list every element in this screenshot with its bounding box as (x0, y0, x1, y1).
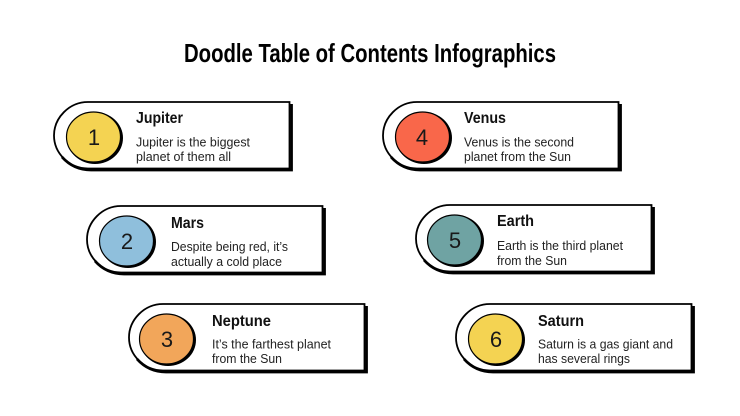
text: Neptune (212, 313, 332, 366)
panel: Mars (87, 206, 324, 274)
icon: number 5 circle (428, 215, 484, 267)
text: Jupiter (136, 110, 251, 164)
text: Venus: Venus (464, 110, 506, 127)
icon: number 2 circle (100, 216, 156, 268)
text: Earth: from the Sun (497, 254, 567, 268)
text: Venus: Venus is the second (464, 136, 574, 150)
icon: number 4 circle (396, 112, 452, 164)
text: Mars (171, 215, 288, 269)
text: Venus: planet from the Sun (464, 150, 571, 164)
panel: Earth (416, 205, 654, 273)
text: Jupiter: Jupiter (136, 110, 183, 127)
icon: number 4 circle: 4 (416, 125, 428, 150)
panel: Jupiter (54, 102, 292, 170)
icon: number 1 circle: 1 (88, 125, 100, 150)
icon: number 1 circle (66, 112, 123, 164)
text: Earth (497, 213, 624, 268)
icon: number 5 circle: 5 (449, 228, 461, 253)
text: Mars: Despite being red, it’s (171, 240, 288, 254)
icon: number 6 circle: 6 (490, 327, 502, 352)
panel: Neptune (129, 304, 366, 372)
title: Doodle Table of Contents Infographics (184, 38, 556, 68)
panel: Venus (383, 102, 620, 170)
panel: Saturn (456, 304, 694, 372)
icon: number 3 circle (140, 314, 196, 366)
text: Saturn: has several rings (538, 352, 630, 366)
text: Earth: Earth is the third planet (497, 239, 624, 253)
icon: number 2 circle: 2 (121, 229, 133, 254)
text: Mars: Mars (171, 215, 204, 232)
text: Neptune: It’s the farthest planet (212, 338, 332, 352)
text: Neptune: from the Sun (212, 352, 282, 366)
text: Saturn: Saturn is a gas giant and (538, 338, 673, 352)
text: Venus (464, 110, 574, 164)
text: Mars: actually a cold place (171, 255, 282, 269)
text: Saturn: Saturn (538, 313, 584, 330)
icon: number 3 circle: 3 (161, 327, 173, 352)
icon: number 6 circle (468, 314, 525, 366)
text: Neptune: Neptune (212, 313, 271, 330)
text: Saturn (538, 313, 673, 366)
text: Jupiter: Jupiter is the biggest (136, 136, 251, 150)
text: Earth: Earth (497, 213, 534, 230)
text: Jupiter: planet of them all (136, 150, 231, 164)
